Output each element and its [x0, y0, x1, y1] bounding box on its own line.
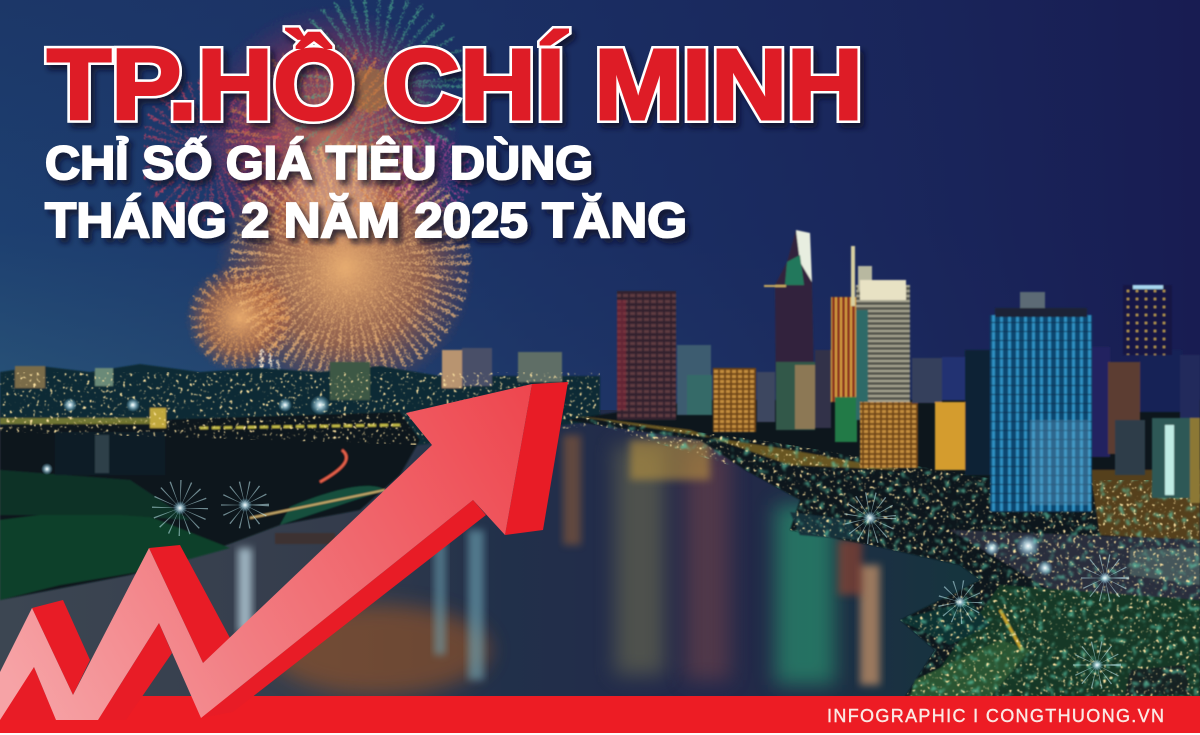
fireworks over the city: [174, 5, 475, 408]
rising red arrow: [0, 382, 568, 720]
light flares: [41, 395, 1117, 677]
waterfront lights texture: [565, 415, 1200, 700]
left city lights texture: [0, 372, 600, 447]
background night sky: [0, 0, 1200, 420]
footer credit: INFOGRAPHIC I CONGTHUONG.VN: [827, 706, 1164, 726]
title: city name: TP.HỒ CHÍ MINH: [47, 29, 863, 141]
footer band: [0, 696, 1200, 733]
title: city name: TP.HỒ CHÍ MINH: [47, 29, 863, 141]
river: [0, 410, 1200, 700]
title block: [45, 29, 863, 248]
right bank: shoreline and waterfront: [565, 400, 1200, 697]
left bank: distant city and green land: [0, 348, 600, 600]
skyline buildings: [617, 230, 1200, 512]
subtitle line 1: CHỈ SỐ GIÁ TIÊU DÙNG: [45, 136, 593, 189]
subtitle line 2: THÁNG 2 NĂM 2025 TĂNG: [45, 194, 687, 248]
